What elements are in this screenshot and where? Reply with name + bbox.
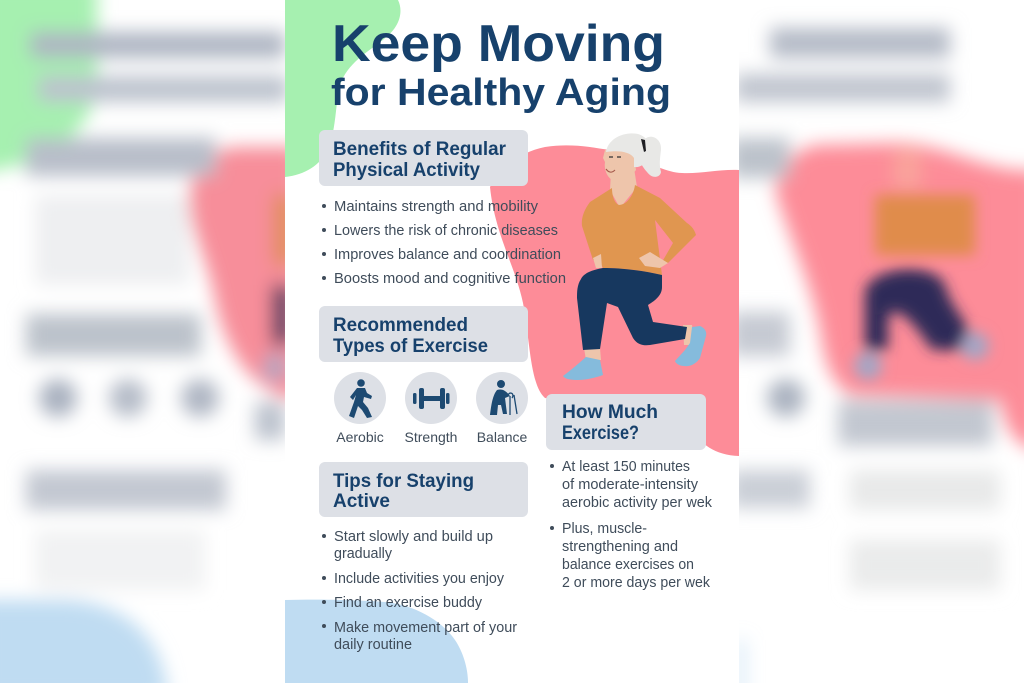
- front shoe: [563, 357, 603, 380]
- tips list: gradually: [334, 546, 393, 562]
- heading: how much: Exercise?: [562, 423, 639, 444]
- label: aerobic: Aerobic: [336, 429, 384, 445]
- benefits list: Lowers the risk of chronic diseases: [334, 223, 558, 239]
- tips list: [322, 529, 517, 653]
- poster content: [285, 0, 739, 683]
- illustration: woman in lunge: [563, 133, 706, 380]
- tips list: daily routine: [334, 637, 412, 653]
- icon: aerobic: [334, 372, 386, 424]
- hair bun: [638, 137, 661, 177]
- how much list: strengthening and: [562, 539, 678, 555]
- hair tie: [641, 139, 646, 152]
- label: strength: Strength: [405, 429, 457, 445]
- hands: [593, 252, 668, 268]
- heading: tips: [319, 462, 528, 517]
- blurred backdrop: right: [730, 28, 1024, 683]
- heading: exercise types: [319, 306, 528, 362]
- benefits list: [322, 199, 566, 287]
- heading: benefits: Benefits of Regular: [333, 139, 507, 160]
- heading: tips: Tips for Staying: [333, 471, 474, 492]
- panel: tips: [319, 462, 528, 653]
- sweater: [582, 185, 696, 275]
- title: Keep Moving: [332, 15, 665, 73]
- poster panel: [285, 0, 739, 683]
- heading: tips: Active: [333, 491, 390, 512]
- panel: exercise types: [319, 306, 528, 445]
- face details: [609, 156, 621, 158]
- panel: benefits: [319, 130, 566, 287]
- how much list: aerobic activity per wek: [562, 495, 713, 511]
- tips list: Start slowly and build up: [334, 529, 493, 545]
- decorative blob: blue: [285, 600, 468, 683]
- how much list: balance exercises on: [562, 557, 694, 573]
- decorative blob: pink: [490, 145, 739, 456]
- tips list: Include activities you enjoy: [334, 571, 505, 587]
- heading: how much: How Much: [562, 402, 658, 423]
- hair: [606, 133, 650, 167]
- panel: how much exercise: [546, 394, 713, 591]
- blurred backdrop: left: [0, 0, 300, 683]
- how much list: 2 or more days per wek: [562, 575, 711, 591]
- how much list: At least 150 minutes: [562, 459, 690, 475]
- icon: balance: [476, 372, 528, 424]
- blurred backdrop: figure: [854, 195, 989, 380]
- decorative blob: green: [285, 0, 400, 177]
- label: balance: Balance: [477, 429, 528, 445]
- icon: strength: [405, 372, 457, 424]
- title: for Healthy Aging: [331, 72, 671, 114]
- back shoe: [675, 326, 706, 366]
- face: [603, 146, 636, 181]
- heading: benefits: Physical Activity: [333, 160, 480, 181]
- tips list: Find an exercise buddy: [334, 595, 483, 611]
- benefits list: Improves balance and coordination: [334, 247, 561, 263]
- title: [331, 15, 671, 114]
- heading: how much: [546, 394, 706, 450]
- how much list: Plus, muscle-: [562, 521, 647, 537]
- heading: benefits: [319, 130, 528, 186]
- benefits list: Boosts mood and cognitive function: [334, 271, 566, 287]
- skin: neck and ankles: [610, 168, 637, 208]
- how much list: of moderate-intensity: [562, 477, 699, 493]
- tips list: Make movement part of your: [334, 620, 517, 636]
- heading: exercise types: Types of Exercise: [333, 336, 488, 357]
- how much list: [550, 459, 713, 591]
- heading: exercise types: Recommended: [333, 315, 468, 336]
- pants: [577, 268, 687, 350]
- benefits list: Maintains strength and mobility: [334, 199, 539, 215]
